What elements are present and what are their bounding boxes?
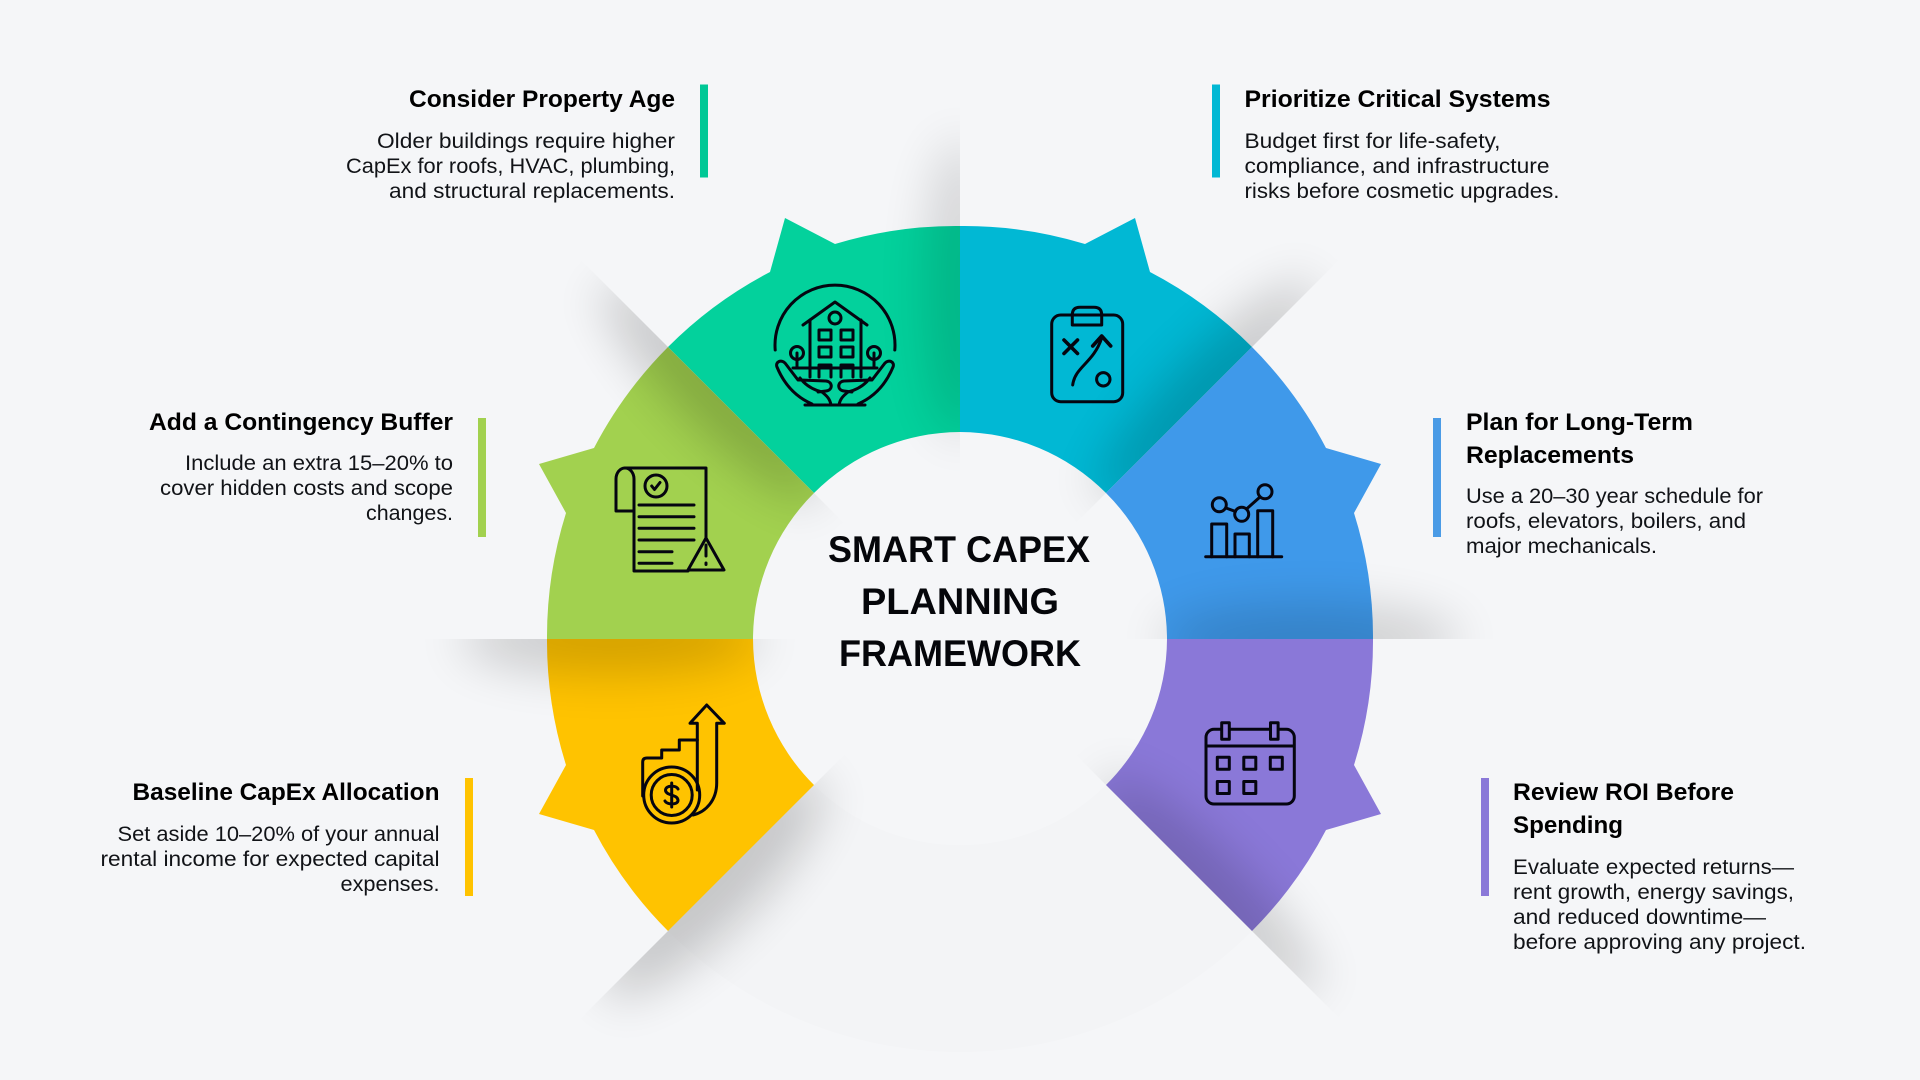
description: changes. [366,501,453,525]
panel: prioritize critical systems [1212,84,1560,203]
fold shadows along segment boundaries [460,139,1460,1022]
faint empty ring sector [668,785,1252,1052]
description: rent growth, energy savings, [1513,880,1794,904]
description: compliance, and infrastructure [1244,154,1550,178]
center title: FRAMEWORK [839,633,1081,674]
description: Include an extra 15–20% to [185,451,453,475]
accent bar [700,84,708,178]
description: cover hidden costs and scope [160,476,453,500]
description: CapEx for roofs, HVAC, plumbing, [346,154,675,178]
heading: Baseline CapEx Allocation [132,779,440,806]
icon: document with warning [616,468,724,571]
icon: coin with rising arrow [643,705,724,823]
panel: long-term replacements [1433,409,1763,558]
description: Evaluate expected returns— [1513,855,1795,879]
icon: bar chart with trend [1206,485,1282,557]
description [1466,484,1763,558]
heading [1513,779,1734,839]
accent bar [1212,84,1220,178]
description: Use a 20–30 year schedule for [1466,484,1763,508]
description: roofs, elevators, boilers, and [1466,509,1746,533]
description: expenses. [340,872,440,896]
description [1513,855,1806,954]
heading: Add a Contingency Buffer [149,409,453,436]
panel: consider property age [346,84,708,203]
segment: property age [668,218,960,493]
description: before approving any project. [1513,930,1806,954]
panel: review ROI [1481,778,1806,954]
heading: Replacements [1466,442,1634,469]
center title [828,529,1090,674]
infographic canvas [102,84,1804,1010]
heading: Consider Property Age [409,86,675,113]
segment: baseline allocation [539,639,814,931]
description: and reduced downtime— [1513,905,1767,929]
heading [1466,409,1693,469]
description: Older buildings require higher [377,129,675,153]
description [1244,129,1560,203]
accent bar [478,418,486,537]
segment: review ROI [1106,639,1381,931]
description: major mechanicals. [1466,534,1657,558]
description: risks before cosmetic upgrades. [1244,179,1560,203]
icon: calendar [1206,723,1294,804]
icon: house in hands [775,285,895,405]
accent bar [1433,418,1441,537]
accent bar [1481,778,1489,896]
description [100,822,440,896]
heading: Spending [1513,812,1623,839]
heading: Prioritize Critical Systems [1244,86,1550,113]
icon: clipboard strategy [1052,307,1123,402]
description [160,451,453,525]
accent bar [465,778,473,896]
segment: long-term replacements [1106,347,1381,639]
description [346,129,675,203]
ring segments [539,218,1381,931]
description: Budget first for life-safety, [1244,129,1500,153]
heading: Plan for Long-Term [1466,409,1693,436]
description: and structural replacements. [389,179,675,203]
segment: critical systems [960,218,1252,493]
segment: contingency buffer [539,347,814,639]
panel: contingency buffer [149,409,486,537]
center title: SMART CAPEX [828,529,1090,570]
description: rental income for expected capital [100,847,440,871]
description: Set aside 10–20% of your annual [118,822,440,846]
panel: baseline capex allocation [100,778,473,896]
center title: PLANNING [861,581,1059,622]
heading: Review ROI Before [1513,779,1734,806]
